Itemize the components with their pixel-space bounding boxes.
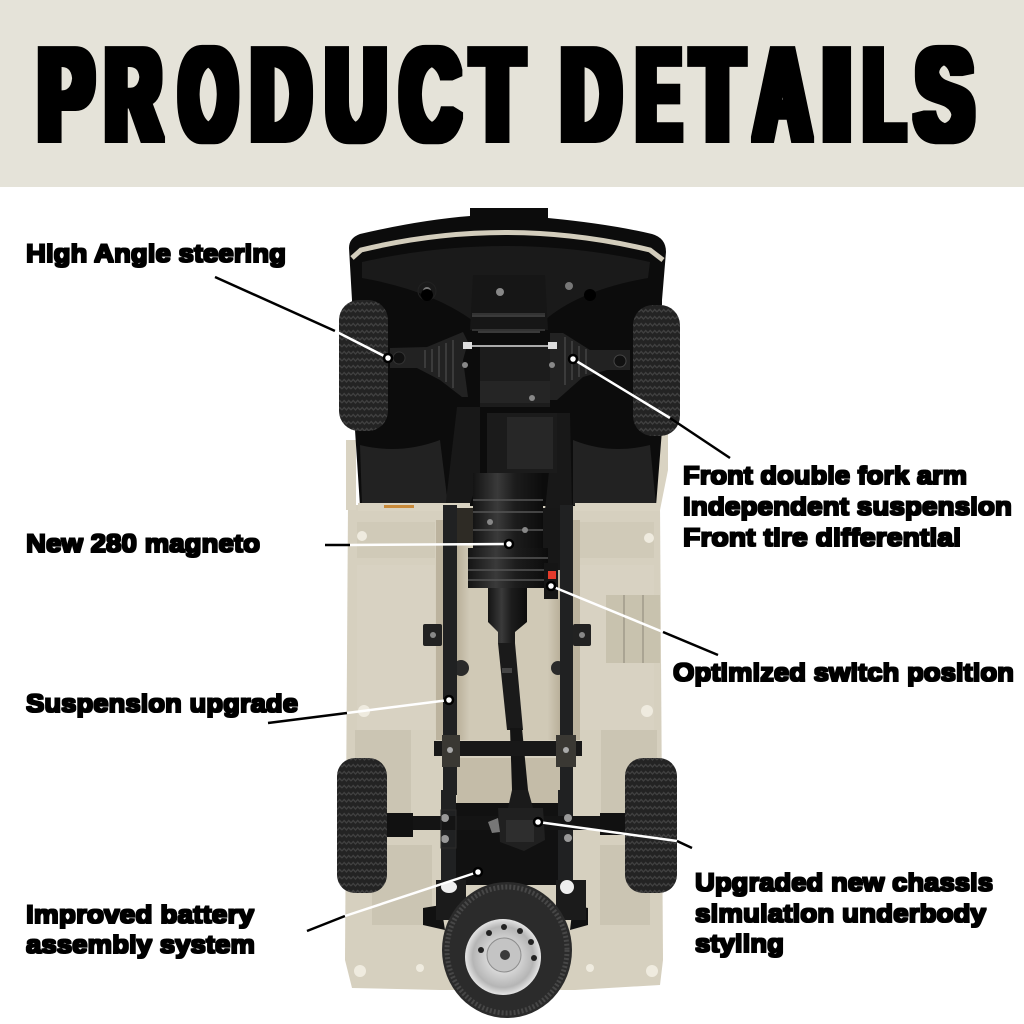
label: suspension upgrade: Suspension upgrade xyxy=(26,690,298,718)
title: D xyxy=(251,21,310,168)
label: upgraded chassis xyxy=(695,869,993,958)
front right tyre xyxy=(633,305,680,436)
power switch xyxy=(544,563,558,599)
label: improved battery xyxy=(26,901,255,959)
spare wheel xyxy=(442,882,572,1018)
title: S xyxy=(916,21,973,168)
title: R xyxy=(106,21,161,168)
rear battery plate xyxy=(456,803,558,885)
callout: switch line xyxy=(547,582,718,655)
callout: suspension upgrade line xyxy=(268,696,453,723)
front left wishbone arm xyxy=(390,332,468,397)
title: L xyxy=(864,21,904,168)
label: front suspension: Front double fork arm xyxy=(683,462,967,490)
label: improved battery: Improved battery xyxy=(26,901,254,929)
title: C xyxy=(401,21,459,168)
title: T xyxy=(692,21,743,168)
gearbox xyxy=(462,316,557,473)
callout: chassis line xyxy=(534,818,692,848)
beige body shell xyxy=(345,400,668,990)
callout: high angle steering line xyxy=(215,277,392,362)
label: optimized switch position: Optimized switch position xyxy=(673,659,1014,687)
label: front suspension: Independent suspension xyxy=(683,493,1012,521)
title: O xyxy=(180,21,236,168)
rear left tyre xyxy=(337,758,387,893)
title: T xyxy=(472,21,523,168)
rear brackets xyxy=(423,624,591,930)
chassis rails xyxy=(441,505,573,885)
label: high angle steering: High Angle steering xyxy=(26,240,286,268)
front right wishbone arm xyxy=(550,333,630,400)
title: U xyxy=(326,21,386,168)
car chassis photo xyxy=(337,208,680,1018)
black front underbody xyxy=(349,208,666,511)
motor xyxy=(468,473,548,588)
label: front suspension xyxy=(683,462,1012,552)
callout: battery line xyxy=(307,868,482,931)
title banner xyxy=(0,0,1024,187)
title: I xyxy=(821,21,853,168)
label: improved battery: assembly system xyxy=(26,931,255,959)
label: front suspension: Front tire differential xyxy=(683,524,961,552)
cross member xyxy=(434,735,582,767)
label: upgraded chassis: styling xyxy=(695,930,784,958)
label: new 280 magneto: New 280 magneto xyxy=(26,530,260,558)
differential xyxy=(488,790,545,851)
title: D xyxy=(561,21,620,168)
rear axle xyxy=(385,810,630,848)
label: upgraded chassis: Upgraded new chassis xyxy=(695,869,993,897)
title: A xyxy=(755,21,810,168)
label: upgraded chassis: simulation underbody xyxy=(695,900,986,928)
title: E xyxy=(638,21,680,168)
front left tyre xyxy=(339,300,388,431)
drive shaft xyxy=(488,588,528,790)
title: P xyxy=(38,21,93,168)
callout: magneto line xyxy=(325,540,513,548)
callout: front suspension line xyxy=(569,355,730,458)
rear right tyre xyxy=(625,758,677,893)
